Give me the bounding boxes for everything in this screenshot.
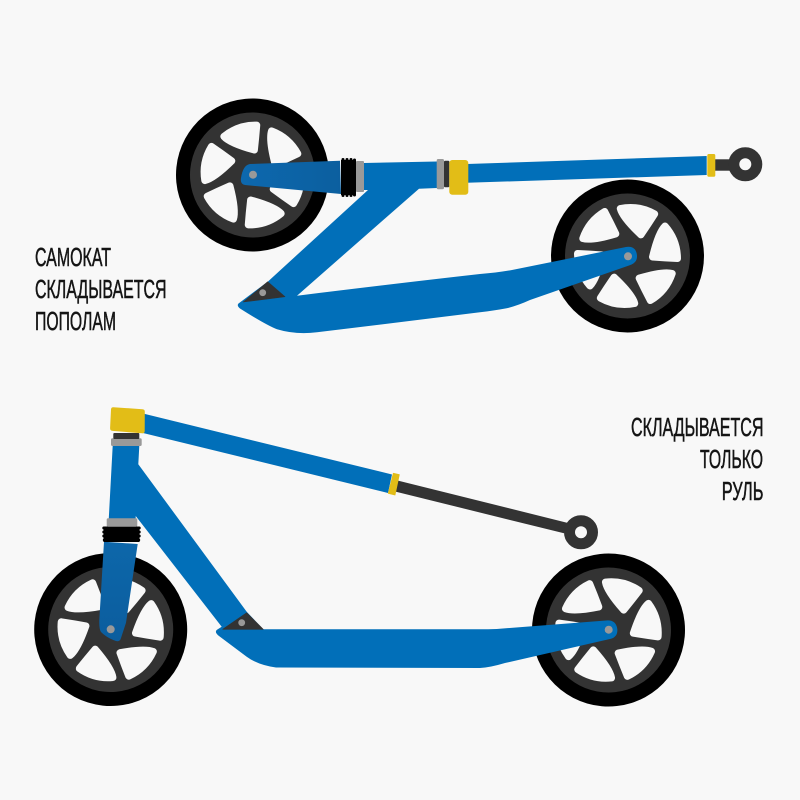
suspension spring [102, 526, 141, 542]
scooter: only handlebar folds [27, 407, 691, 714]
silver collar [107, 518, 137, 527]
caption: folds in half: ПОПОЛАМ [35, 306, 116, 336]
fork [99, 542, 138, 641]
deck hinge [223, 613, 263, 629]
front wheel [27, 545, 195, 714]
frame and deck [109, 446, 617, 668]
handle grip ring [570, 521, 592, 544]
small yellow clamp [388, 473, 399, 495]
rear axle bolt [624, 252, 632, 260]
fork [241, 161, 341, 194]
rear axle bolt [605, 626, 613, 634]
caption: only handlebar folds: РУЛЬ [722, 476, 764, 506]
front axle bolt [107, 625, 115, 633]
caption: only handlebar folds [631, 412, 764, 506]
deck hinge [243, 282, 285, 302]
hinge bolt [259, 289, 266, 296]
scooter: folded in half [149, 72, 757, 333]
hinge bolt [238, 619, 245, 626]
suspension spring [341, 158, 356, 197]
rear wheel [551, 180, 704, 332]
folded handle bar [395, 480, 567, 533]
upper silver collar [111, 438, 142, 446]
front axle bolt [249, 171, 257, 179]
handle grip ring [734, 153, 757, 176]
dark ring [444, 161, 449, 187]
handle bar stub [714, 159, 736, 171]
rear wheel [526, 547, 691, 713]
folding latch [110, 407, 145, 433]
small yellow clamp [707, 154, 715, 177]
front wheel [149, 72, 356, 278]
caption: folds in half: САМОКАТ [35, 242, 111, 272]
folding latch [449, 160, 468, 195]
silver collar [356, 161, 364, 192]
handlebar tube [143, 414, 392, 493]
handlebar tube [467, 156, 707, 183]
caption: folds in half: СКЛАДЫВАЕТСЯ [35, 274, 166, 304]
frame and deck [238, 162, 637, 333]
caption: folds in half [35, 242, 166, 336]
upper silver collar [437, 159, 444, 189]
dark ring [113, 433, 139, 439]
